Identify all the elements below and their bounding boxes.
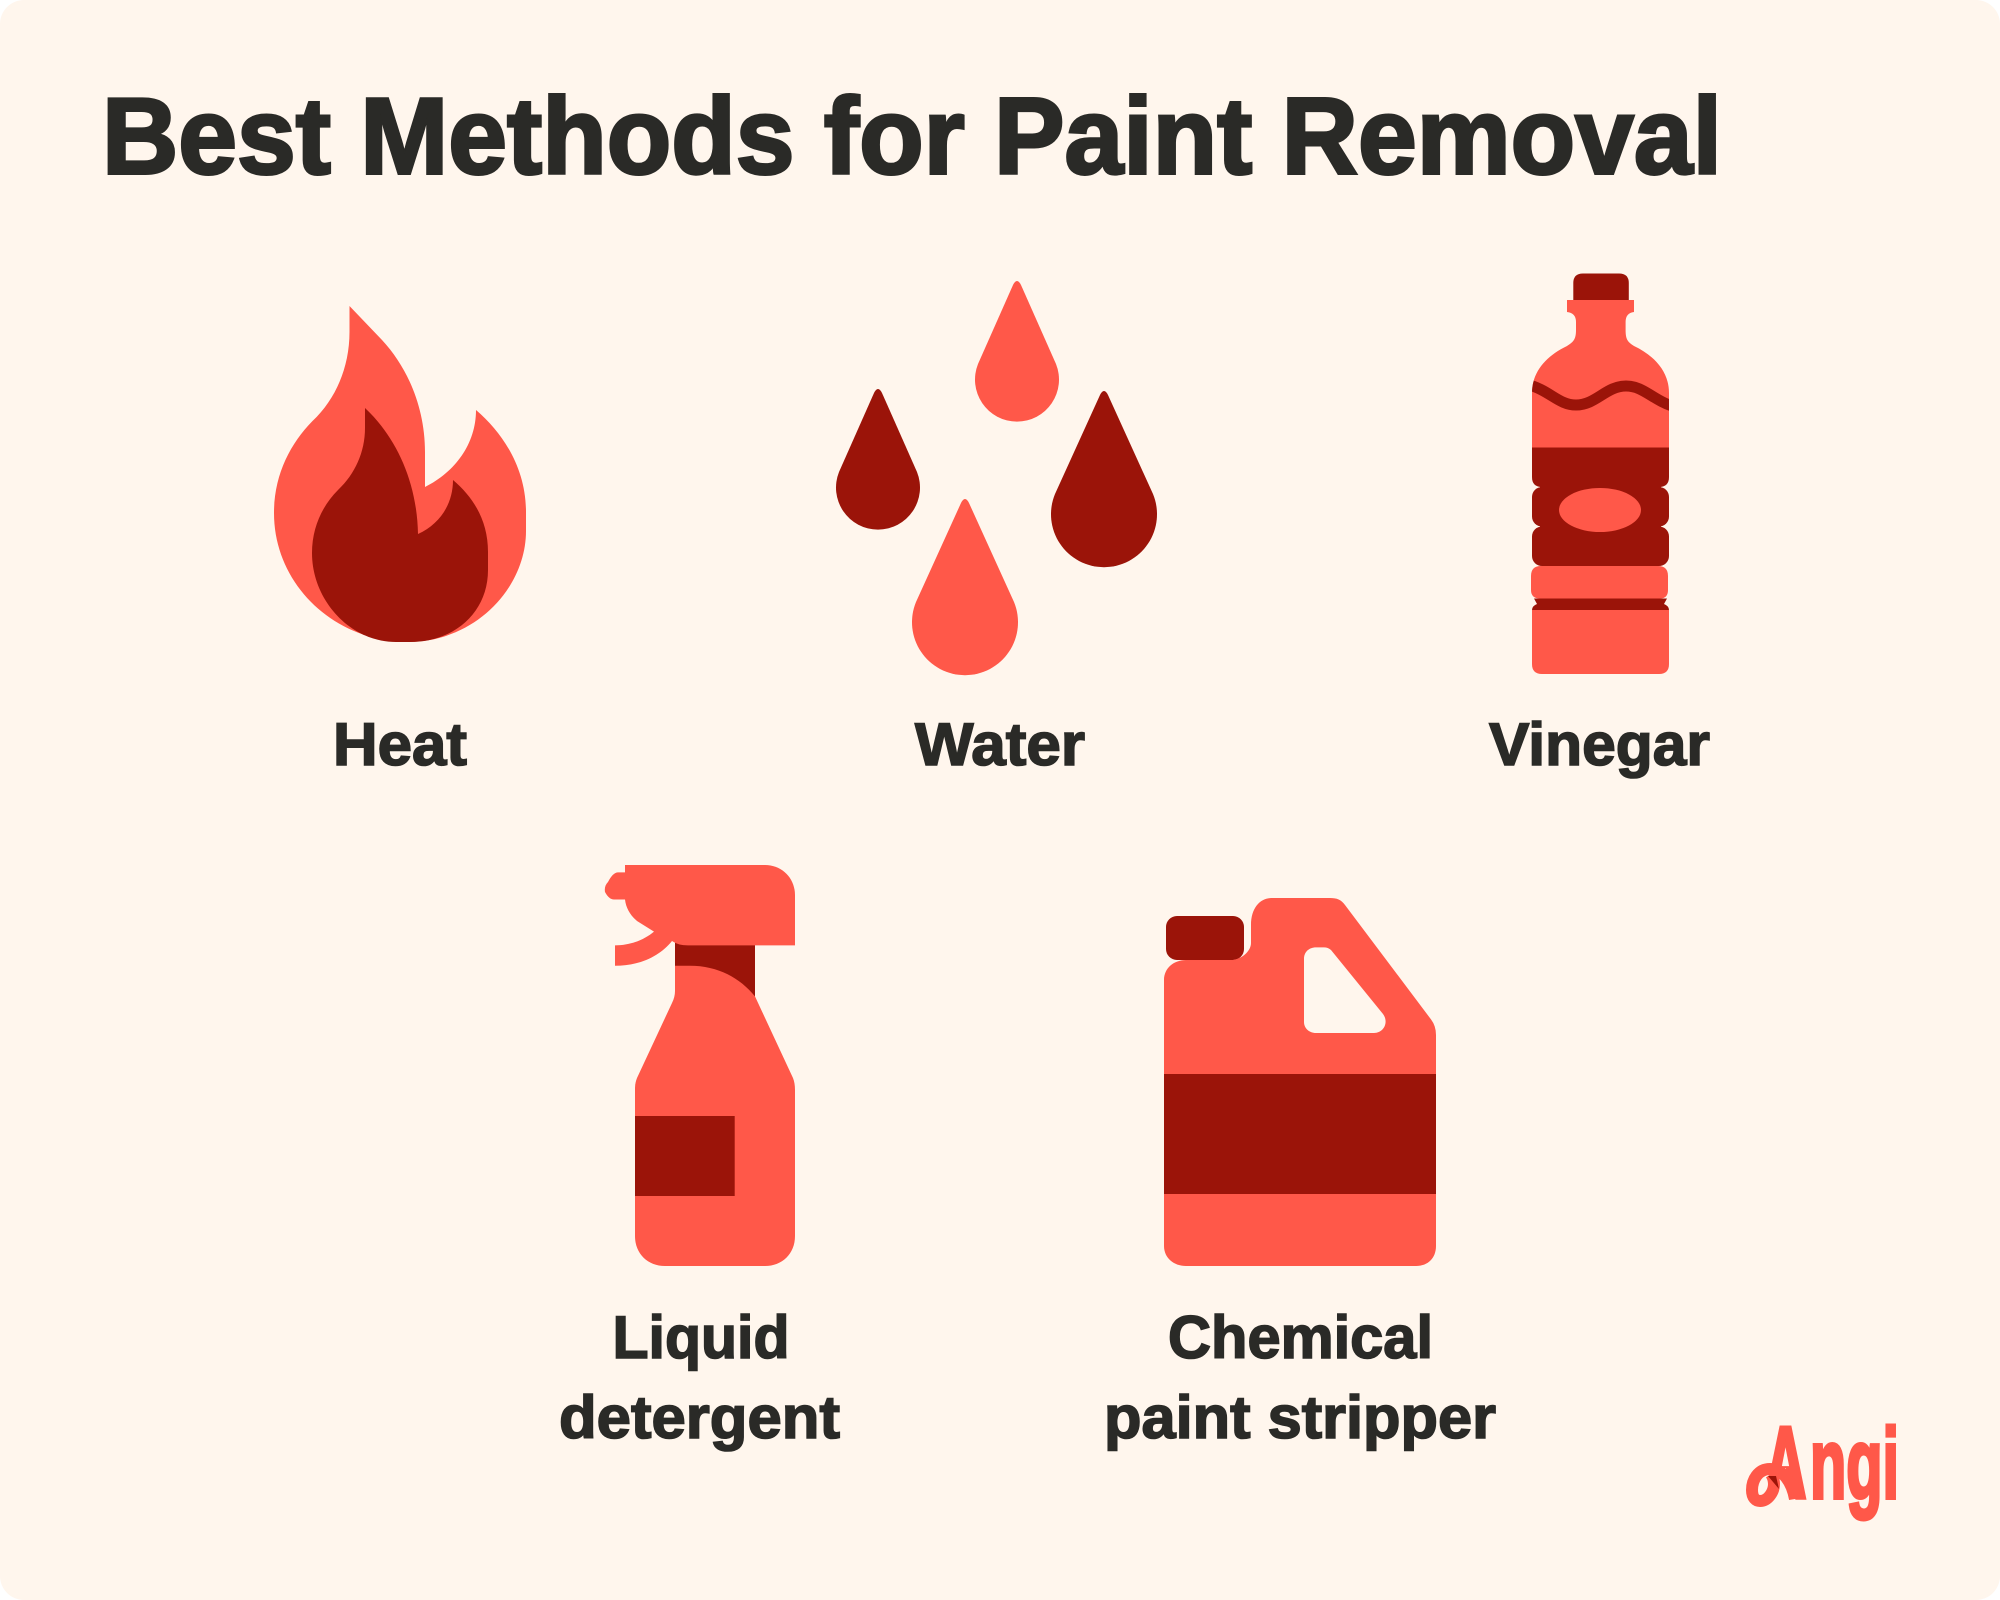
- method: vinegar: [1489, 274, 1710, 778]
- label: water: Water: [915, 711, 1085, 778]
- label: chemical paint stripper: [1104, 1304, 1496, 1451]
- title: Best Methods for Paint Removal: [102, 76, 1722, 198]
- method: water: [836, 281, 1157, 778]
- method: liquid detergent: [559, 865, 840, 1451]
- logo: Angi: [1746, 1424, 1896, 1522]
- label: chemical paint stripper: Chemical: [1168, 1304, 1433, 1371]
- logo: Angi: A: [1765, 1407, 1806, 1519]
- label: liquid detergent: Liquid: [612, 1304, 790, 1371]
- icon: water drops: [836, 281, 1157, 675]
- icon: vinegar bottle: [1526, 274, 1675, 674]
- label: liquid detergent: detergent: [559, 1384, 840, 1451]
- label: vinegar: Vinegar: [1489, 711, 1710, 778]
- icon: spray bottle: [605, 865, 795, 1266]
- logo: Angi: ngi: [1810, 1408, 1899, 1520]
- label: chemical paint stripper: paint stripper: [1104, 1384, 1496, 1451]
- icon: chemical jug: [1164, 898, 1436, 1266]
- label: heat: Heat: [333, 711, 467, 778]
- method: chemical paint stripper: [1104, 898, 1496, 1451]
- icon: flame: [274, 306, 526, 642]
- label: liquid detergent: [559, 1304, 840, 1451]
- method: heat: [274, 306, 526, 778]
